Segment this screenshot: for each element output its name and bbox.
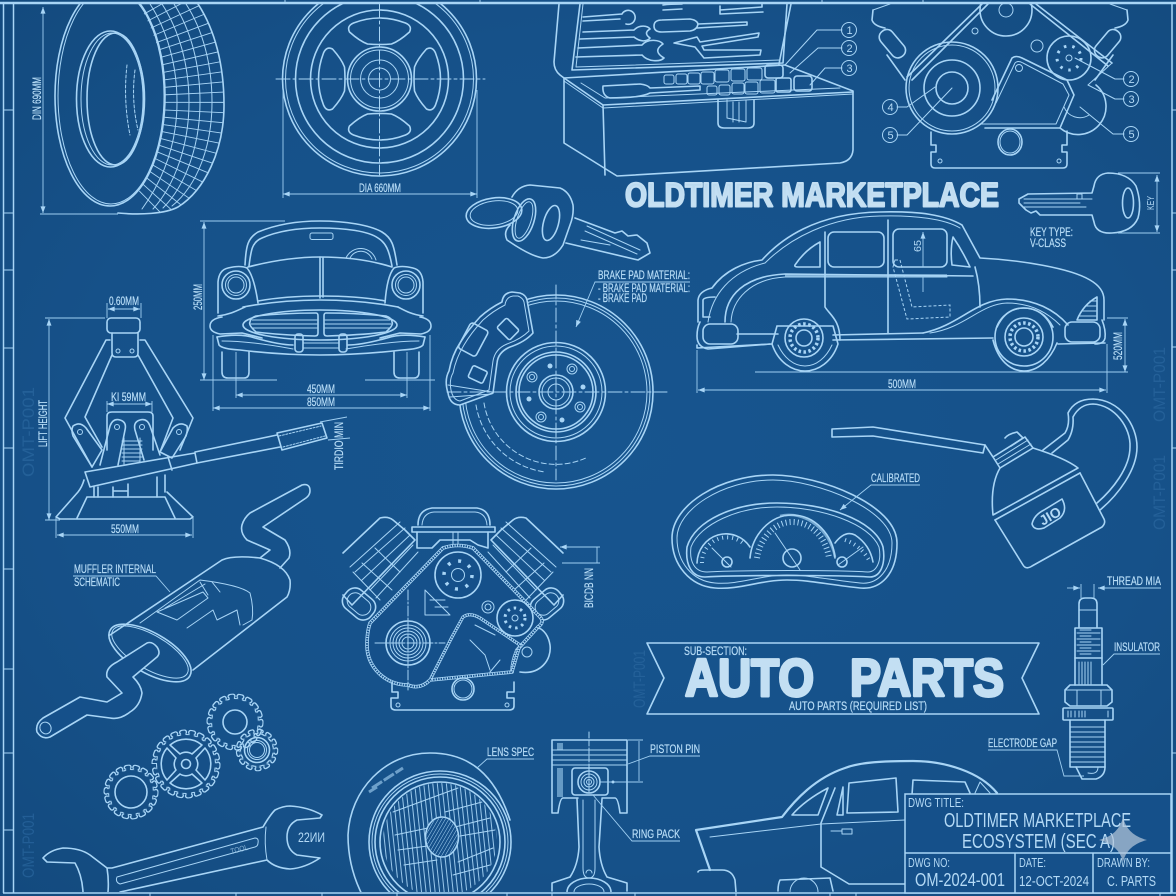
engine callouts: 4 <box>888 102 894 114</box>
muffler outlet pipe <box>37 642 159 738</box>
tire sidewall <box>55 0 165 206</box>
engine callouts <box>882 58 1138 142</box>
car dimensions: 65 <box>913 240 924 252</box>
jack handle <box>85 423 327 487</box>
drawing number <box>908 856 1005 890</box>
engine callouts: 2 <box>1128 74 1135 86</box>
key type note: KEY TYPE: <box>1030 227 1073 239</box>
connecting rod <box>552 799 627 892</box>
muffler label: SCHEMATIC <box>74 577 120 589</box>
brake pad note <box>576 270 690 327</box>
banner eyebrow: SUB-SECTION: <box>684 646 747 658</box>
plug hex and collar <box>1063 685 1113 720</box>
key ring <box>464 194 540 244</box>
brake disc assembly <box>446 270 690 489</box>
jack dimensions: TIRDIO MIN <box>334 422 346 470</box>
sparkle watermark <box>1099 817 1147 862</box>
wrench markings: 22ИИ <box>298 829 325 845</box>
brake pad note: BRAKE PAD MATERIAL: <box>598 270 690 282</box>
lens spec label <box>477 747 534 768</box>
plug labels: THREAD MIA <box>1107 576 1161 588</box>
engine dimension: BICDB NN <box>584 568 596 608</box>
wrench markings: TOOL <box>230 843 250 856</box>
engine callouts: 5 <box>888 130 894 142</box>
toolbox callouts: 3 <box>846 63 853 75</box>
key dimension <box>1118 173 1160 233</box>
toolbox callouts: 2 <box>846 43 853 55</box>
disc hub <box>506 342 606 442</box>
oil can handle <box>1043 399 1137 510</box>
drawn by: C. PARTS <box>1107 873 1156 890</box>
engine callouts: 3 <box>1128 94 1135 106</box>
jack dimensions: 0.60MM <box>109 296 139 308</box>
drawing date: DATE: <box>1019 856 1046 870</box>
lower car roof and body <box>696 761 997 892</box>
drawing number: OM-2024-001 <box>915 870 1005 890</box>
car windows <box>795 229 970 267</box>
V8 engine <box>338 508 600 710</box>
car dimensions <box>697 232 1128 393</box>
front view dimensions <box>193 221 435 411</box>
sub-section banner <box>647 643 1039 714</box>
brake pad note: - BRAKE PAD <box>598 293 647 305</box>
scissor jack <box>38 296 350 538</box>
toolbox callouts <box>785 22 856 85</box>
timing belts <box>367 546 542 687</box>
drawing title <box>908 796 1131 853</box>
muffler top pipe <box>242 485 310 568</box>
small left gear <box>106 767 156 817</box>
rim windows <box>318 18 440 140</box>
plug thread and electrode <box>1070 720 1105 779</box>
toolbox callouts: 1 <box>846 25 853 37</box>
oil can spout <box>832 427 985 453</box>
title block frame <box>905 794 1171 893</box>
gauge arcs <box>697 515 873 563</box>
open-end wrench <box>43 806 325 892</box>
valve cover lobes <box>872 4 1128 80</box>
right key <box>1019 173 1160 250</box>
headlight housing <box>348 753 511 896</box>
piston labels: RING PACK <box>632 829 680 841</box>
hood <box>243 257 398 307</box>
dashed seat outline <box>893 260 950 319</box>
muffler <box>37 485 310 738</box>
jack arms <box>65 340 193 467</box>
spark plug <box>988 576 1161 779</box>
car dimensions: 520MM <box>1113 332 1125 360</box>
plug labels <box>988 576 1161 776</box>
calibrated label <box>840 473 920 510</box>
jack centre screw <box>100 412 160 465</box>
oil can body <box>992 448 1105 568</box>
engine base plate <box>391 678 514 710</box>
key head and blade <box>506 185 650 260</box>
jack dimensions <box>38 296 350 538</box>
banner heading: PARTS <box>850 649 1004 708</box>
piston pin <box>572 732 608 795</box>
rim diameter dimension: DIA 660MM <box>359 183 401 195</box>
faint sheet reference labels: OMT-P001 <box>1150 455 1169 530</box>
engine dimension <box>560 547 600 608</box>
drawn by <box>1097 856 1156 890</box>
banner heading <box>685 649 1004 708</box>
drawing number: DWG NO: <box>908 856 950 870</box>
piston crown <box>552 740 627 813</box>
jack base <box>56 475 193 519</box>
roof and windshield <box>245 221 397 266</box>
lower car windows <box>792 778 990 815</box>
car doors <box>825 220 980 340</box>
piston and connecting rod <box>552 732 700 892</box>
toolbox base <box>564 65 853 176</box>
piston labels <box>593 740 700 841</box>
grille and bumper <box>210 307 431 355</box>
drawn by: DRAWN BY: <box>1097 856 1150 870</box>
large window gear <box>154 732 218 796</box>
headlight <box>348 747 534 896</box>
air cleaner <box>412 508 495 548</box>
pulleys <box>906 0 1106 135</box>
oil can body: JIO <box>1036 503 1064 528</box>
front view dimensions: 450MM <box>307 384 335 396</box>
brake caliper <box>446 292 533 405</box>
fenders and headlights <box>218 266 423 313</box>
banner outline <box>647 643 1039 714</box>
rim circles <box>282 0 476 176</box>
tire tread <box>118 0 224 214</box>
calibrated label: CALIBRATED <box>871 473 920 485</box>
toolbox <box>554 4 856 176</box>
rim diameter dimension <box>283 90 477 198</box>
side view classic car <box>697 212 1128 393</box>
muffler label: MUFFLER INTERNAL <box>74 564 156 576</box>
muffler cutaway <box>140 580 253 628</box>
headlight lens <box>380 780 500 892</box>
jack dimensions: 550MM <box>111 524 139 536</box>
faint sheet reference labels: OMT-P001 <box>630 650 649 708</box>
wheel rim drawing <box>276 0 485 198</box>
front tires <box>222 352 419 378</box>
engine callouts: 5 <box>1128 129 1135 141</box>
faint sheet reference labels: OMT-P001 <box>1150 347 1169 422</box>
key dimension: KEY <box>1146 196 1157 210</box>
key type note: V-CLASS <box>1030 238 1066 250</box>
engine pulleys <box>375 552 550 690</box>
gear cluster <box>106 696 276 817</box>
valve covers <box>338 517 568 624</box>
key body <box>1019 173 1140 233</box>
base plate <box>931 129 1067 168</box>
wrench markings <box>230 832 324 854</box>
drawing date <box>1019 856 1089 890</box>
title: Oldtimer Marketplace: OLDTIMER MARKETPLACE <box>625 176 999 214</box>
disc rotor <box>459 295 653 489</box>
front view classic car <box>193 221 435 411</box>
tools in lid <box>576 4 763 61</box>
plug terminal and insulator <box>1075 598 1102 685</box>
wrench slot <box>116 838 258 884</box>
jack dimensions: KI 59MM <box>111 392 146 404</box>
car body outline <box>697 212 1105 348</box>
muffler body <box>100 557 290 693</box>
front view dimensions: 250MM <box>193 284 205 310</box>
car dimensions: 500MM <box>888 379 916 391</box>
bumpers and lights <box>697 297 1105 349</box>
piston labels: PISTON PIN <box>650 744 700 756</box>
belts <box>907 4 1112 128</box>
top gear <box>209 696 261 748</box>
cluster housing <box>672 475 897 588</box>
brake pad note: - BRAKE PAD MATERIAL: <box>598 283 690 295</box>
front view dimensions: 850MM <box>307 397 335 409</box>
wrench outline <box>43 806 322 892</box>
tire drawing <box>32 0 224 214</box>
jack head <box>107 318 140 357</box>
small right gear <box>238 731 276 769</box>
gauge needles <box>712 533 863 570</box>
left key with ring <box>464 185 650 260</box>
faint sheet reference labels: OMT-P001 <box>19 813 38 878</box>
oil can <box>832 399 1137 568</box>
top right engine front view <box>872 0 1138 168</box>
gauge ticks <box>702 522 869 563</box>
muffler label <box>73 564 170 592</box>
plug labels: ELECTRODE GAP <box>988 738 1057 750</box>
drawing date: 12-OCT-2024 <box>1019 873 1089 890</box>
faint sheet reference labels <box>19 347 1169 878</box>
banner note: AUTO PARTS (REQUIRED LIST) <box>789 701 927 713</box>
instrument cluster <box>672 473 920 588</box>
lens spec label: LENS SPEC <box>487 747 534 759</box>
title block <box>905 794 1171 893</box>
drawing title: DWG TITLE: <box>908 796 964 810</box>
key type note <box>1030 227 1073 250</box>
tire height dimension: DIN 690MM <box>32 77 44 120</box>
faint sheet reference labels: OMT-P001 <box>19 387 38 477</box>
threaded collar and cap <box>985 432 1033 468</box>
jack dimensions: LIFT HEIGHT <box>38 400 50 447</box>
sockets and driver in tray <box>603 65 812 98</box>
lower right car partial view <box>696 761 997 892</box>
toolbox lid <box>554 4 791 78</box>
drawing title: ECOSYSTEM (SEC A) <box>962 831 1115 853</box>
banner heading: AUTO <box>685 649 814 708</box>
car wheels <box>772 308 1057 371</box>
